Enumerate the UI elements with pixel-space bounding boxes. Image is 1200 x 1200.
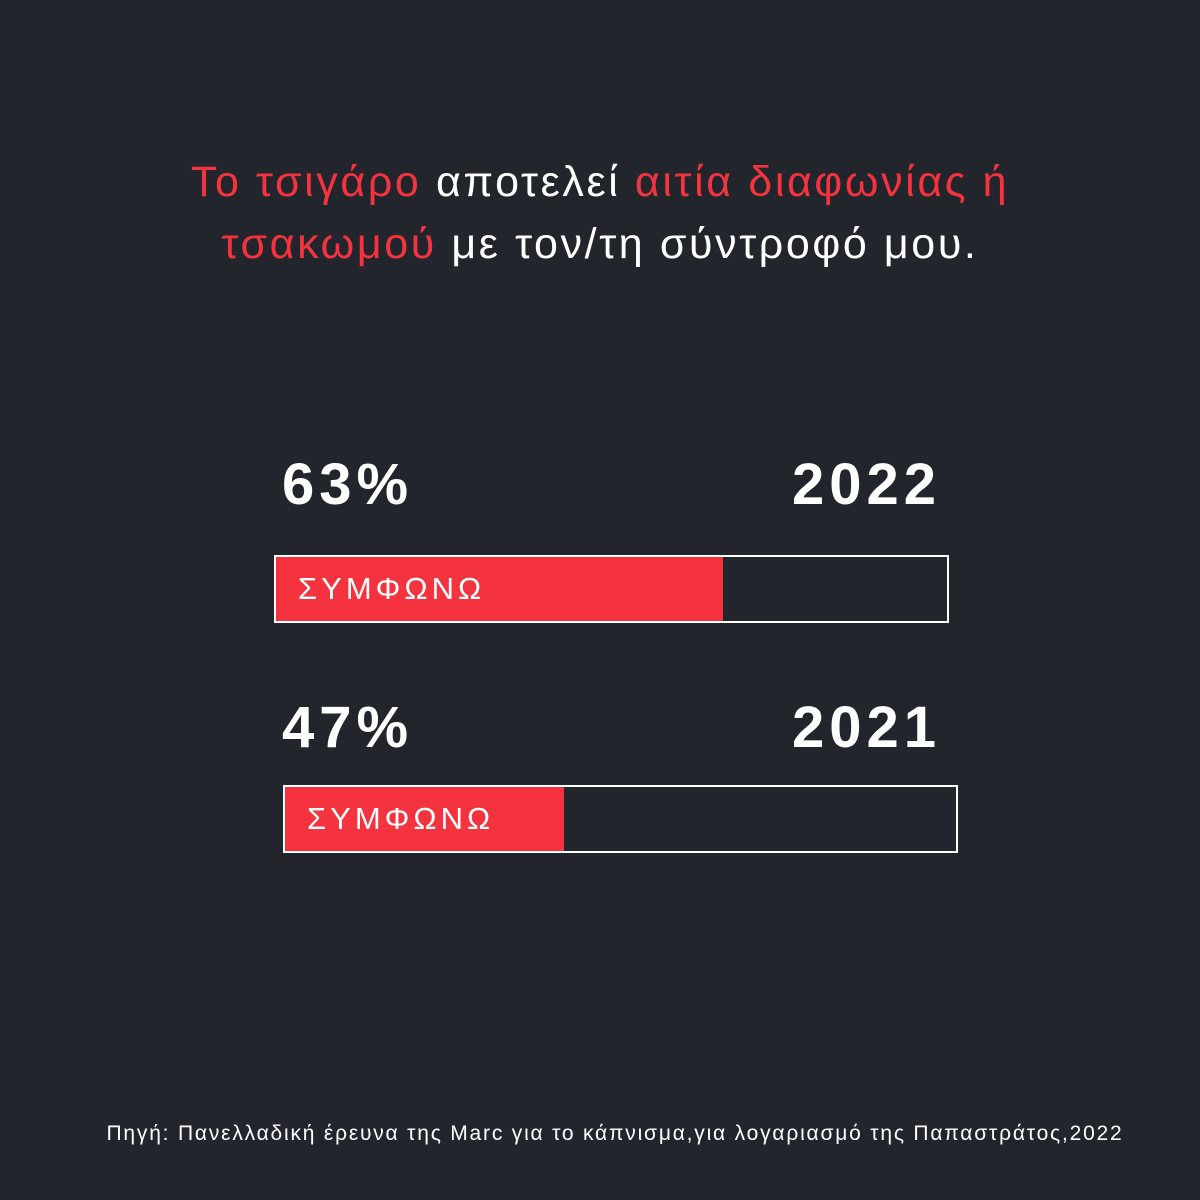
year 2021: 2021 [792,695,941,760]
title: Το τσιγάρο αποτελεί αιτία διαφωνίας ή [191,158,1009,206]
value 47%: 47% [282,695,413,760]
fill 63%: ΣΥΜΦΩΝΩ [298,571,485,606]
bar 2021 [283,785,958,853]
fill 47%: ΣΥΜΦΩΝΩ [307,801,494,836]
bar 2022 [274,555,949,623]
year 2022: 2022 [792,452,941,517]
fill 47% [285,787,564,851]
value 63%: 63% [282,452,413,517]
fill 63% [276,557,723,621]
title [191,158,1009,268]
source: Πηγή: Πανελλαδική έρευνα της Marc για το κάπνισμα,για λογαριασμό της Παπαστράτος,2022 [106,1122,1124,1145]
title: τσακωμού με τον/τη σύντροφό μου. [222,220,978,268]
